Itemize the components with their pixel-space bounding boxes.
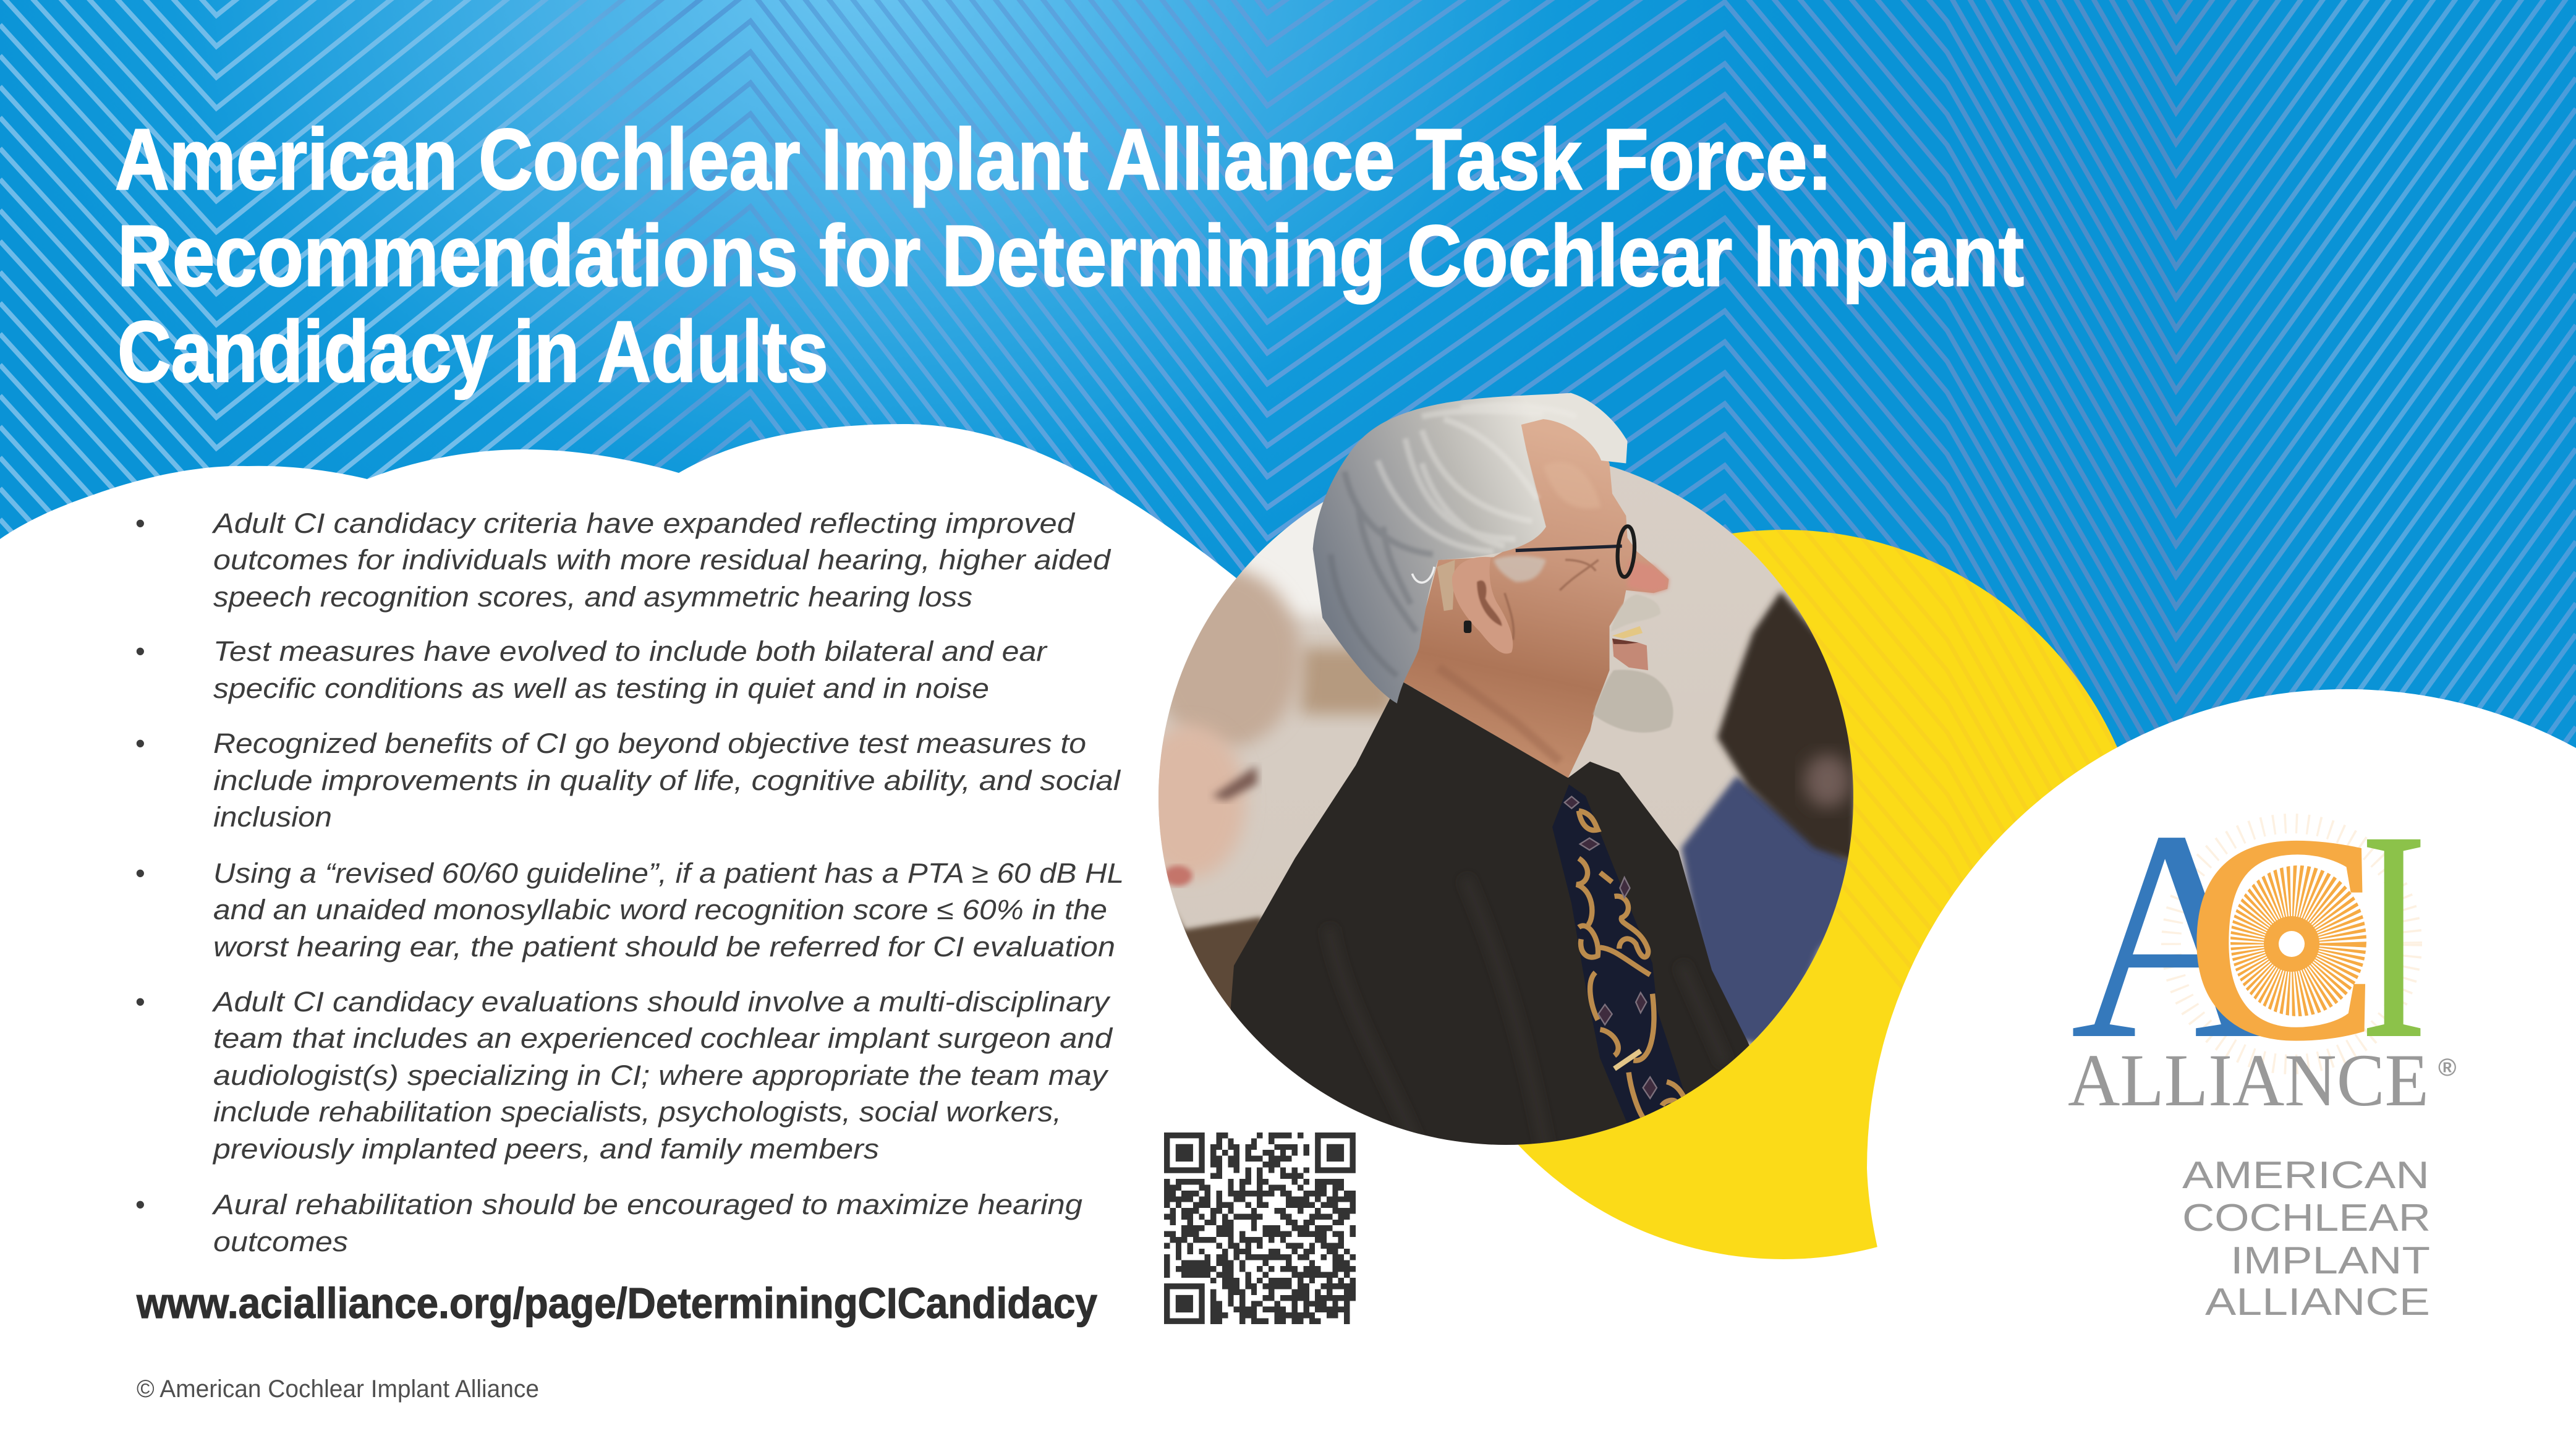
man: face and neck <box>1400 406 1669 778</box>
bullet 4: • <box>135 857 145 889</box>
title: Candidacy in Adults <box>117 303 828 400</box>
bullet 1 <box>135 508 1112 613</box>
organization name: AMERICAN <box>2182 1154 2429 1197</box>
bullet 2: • <box>135 635 145 667</box>
organization name: IMPLANT <box>2230 1239 2430 1282</box>
organization name <box>2182 1154 2431 1324</box>
bullet 1: outcomes for individuals with more residual hearing, higher aided <box>213 544 1112 576</box>
yellow circle with faint chevrons <box>1518 530 2117 1259</box>
logo: sun burst <box>2240 892 2344 996</box>
bullet 3: • <box>135 728 145 759</box>
bullet 5: team that includes an experienced cochlear implant surgeon and <box>213 1022 1113 1054</box>
man: mustache, mouth and beard <box>1611 594 1660 632</box>
logo: letter I: I <box>2360 769 2428 1102</box>
organization name: ALLIANCE <box>2205 1281 2430 1324</box>
bullet 4: Using a “revised 60/60 guideline”, if a patient has a PTA ≥ 60 dB HL <box>213 857 1124 889</box>
photo: smiling man with cochlear implant in circle <box>1135 393 1855 1175</box>
bullet 6: outcomes <box>213 1226 348 1257</box>
logo: letter C: C <box>2186 775 2380 1100</box>
bullet 6 <box>135 1189 1082 1257</box>
logo: faint outer sun rays <box>2171 823 2412 1064</box>
panel: white circle behind logo <box>1867 689 2576 1449</box>
bullet list: recommendations <box>135 508 1124 1257</box>
bullet 5: previously implanted peers, and family members <box>212 1133 879 1165</box>
bullet 6: • <box>135 1189 145 1220</box>
title: American Cochlear Implant Alliance Task Force: <box>115 111 1832 208</box>
man: shirt <box>1230 680 1768 1175</box>
man: head <box>1313 393 1673 778</box>
bullet 5: include rehabilitation specialists, psychologists, social workers, <box>213 1096 1061 1128</box>
bullet 6: Aural rehabilitation should be encouraged to maximize hearing <box>211 1189 1082 1220</box>
bullet 4 <box>135 857 1124 962</box>
copyright: © American Cochlear Implant Alliance <box>137 1375 539 1403</box>
bullet 2: Test measures have evolved to include both bilateral and ear <box>213 635 1048 667</box>
bullet 3: Recognized benefits of CI go beyond objective test measures to <box>213 728 1086 759</box>
bullet 1: • <box>135 508 145 539</box>
website URL: www.acialliance.org/page/DeterminingCICandidacy <box>136 1279 1097 1327</box>
logo: white backing for sun <box>2204 844 2365 1035</box>
logo: letter A: A <box>2070 769 2277 1102</box>
logo: registered mark: ® <box>2438 1054 2456 1081</box>
logo: ALLIANCE wordmark: ALLIANCE <box>2068 1039 2429 1122</box>
bullet 3 <box>135 728 1121 833</box>
QR code <box>1164 1132 1356 1324</box>
man: processor and ear <box>1437 560 1455 611</box>
bullet 3: inclusion <box>213 801 332 833</box>
bullet 2: specific conditions as well as testing in quiet and in noise <box>213 673 989 704</box>
bullet 4: worst hearing ear, the patient should be referred for CI evaluation <box>213 931 1115 962</box>
bullet 2 <box>135 635 1048 704</box>
bullet 5: • <box>135 986 145 1018</box>
man: glasses <box>1516 546 1622 551</box>
organization name: COCHLEAR <box>2182 1197 2431 1239</box>
bullet 1: Adult CI candidacy criteria have expanded reflecting improved <box>211 508 1076 539</box>
bullet 5: Adult CI candidacy evaluations should involve a multi-disciplinary <box>211 986 1111 1018</box>
logo: ACI Alliance <box>2068 769 2456 1122</box>
bullet 5: audiologist(s) specializing in CI; where appropriate the team may <box>213 1060 1109 1091</box>
man: tie <box>1552 784 1685 1123</box>
man: cochlear implant wire <box>1412 567 1434 582</box>
bullet 5 <box>135 986 1113 1165</box>
panel: white cloud background <box>0 424 2576 1449</box>
bullet 1: speech recognition scores, and asymmetric hearing loss <box>213 581 972 613</box>
bullet 4: and an unaided monosyllabic word recognition score ≤ 60% in the <box>213 894 1107 925</box>
title: Recommendations for Determining Cochlear Implant <box>117 207 2024 304</box>
bullet 3: include improvements in quality of life, cognitive ability, and social <box>213 765 1121 796</box>
title <box>115 111 2024 400</box>
man: hair <box>1313 393 1628 703</box>
